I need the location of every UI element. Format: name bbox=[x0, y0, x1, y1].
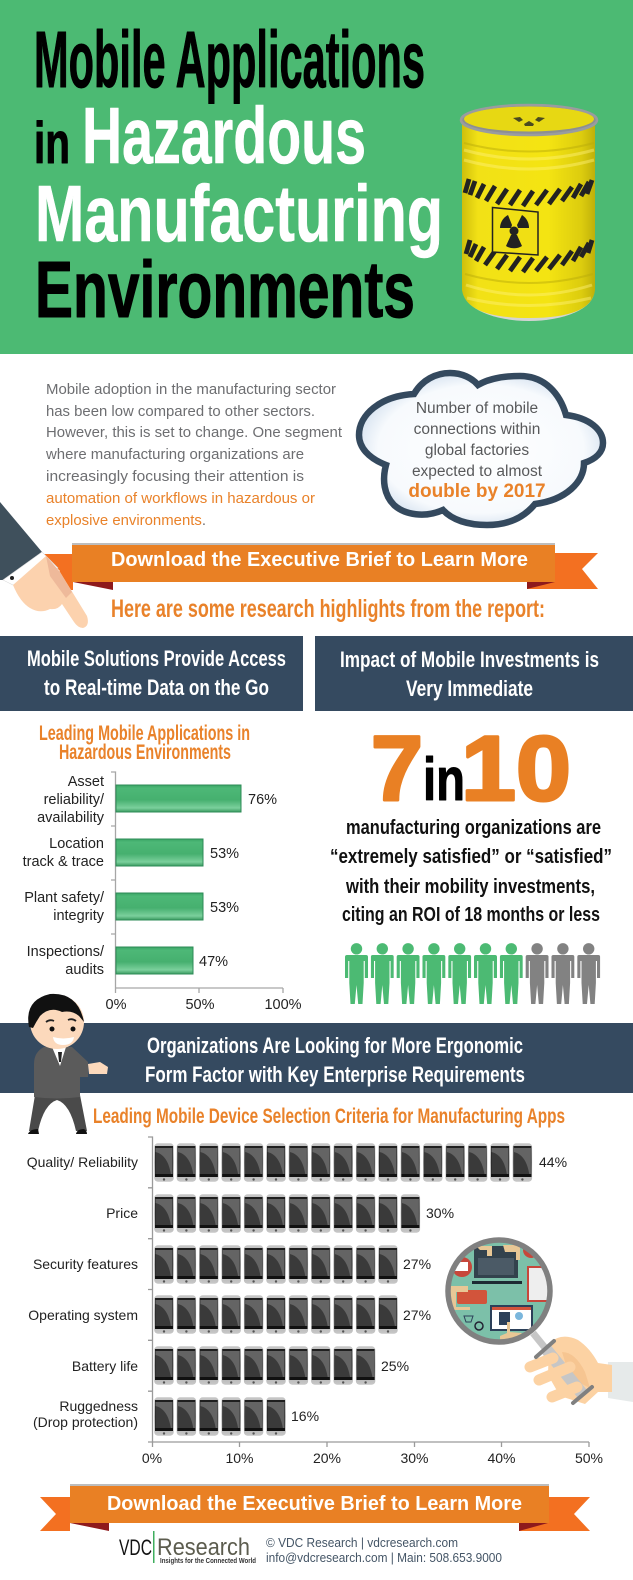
title bbox=[34, 15, 443, 334]
bar: location track and trace: Location bbox=[49, 836, 104, 852]
title: in bbox=[34, 111, 70, 176]
statistic: 7 in 10: in bbox=[423, 746, 465, 813]
panel: mobile solutions heading: Mobile Solutions Provide Access bbox=[27, 646, 286, 671]
callout: cloud: global factories bbox=[425, 442, 529, 459]
text block: intro: where manufacturing organizations are bbox=[45, 447, 304, 463]
row: battery life: Battery life bbox=[72, 1358, 138, 1374]
row: price: Price bbox=[106, 1205, 138, 1221]
axis labels: 0% bbox=[106, 997, 127, 1013]
text block: contact bbox=[266, 1535, 502, 1565]
axis labels: 30% bbox=[400, 1450, 429, 1466]
row: operating system: 27% bbox=[403, 1307, 431, 1323]
icon: pointing hand bbox=[0, 502, 88, 628]
chart heading: leading mobile applications: Hazardous Environments bbox=[59, 741, 231, 764]
bar: inspections: 47% bbox=[199, 954, 228, 970]
bar: asset reliability bbox=[37, 774, 277, 826]
row: quality and reliability: 44% bbox=[539, 1154, 567, 1170]
callout: cloud: expected to almost bbox=[412, 463, 543, 480]
text block: intro: Mobile adoption in the manufacturing sector bbox=[46, 382, 336, 398]
panel: ergonomic form factor heading: Form Factor with Key Enterprise Requirements bbox=[145, 1062, 525, 1087]
title: Hazardous bbox=[82, 91, 366, 180]
bar: plant safety: integrity bbox=[53, 908, 105, 924]
banner: download top bbox=[43, 543, 598, 590]
title: Manufacturing bbox=[35, 169, 443, 258]
row: ruggedness: 16% bbox=[291, 1408, 319, 1424]
axis labels: 10% bbox=[225, 1450, 254, 1466]
logo: VDC Research: VDC bbox=[119, 1535, 152, 1560]
bar: asset reliability: 76% bbox=[248, 792, 277, 808]
callout: cloud: double by 2017 bbox=[408, 481, 546, 502]
callout: cloud: Number of mobile bbox=[416, 400, 538, 417]
bar: plant safety: Plant safety/ bbox=[24, 890, 105, 906]
panel: mobile solutions heading: to Real-time Data on the Go bbox=[44, 675, 269, 700]
text block: intro: has been low compared to other sectors. bbox=[46, 404, 315, 420]
row: price bbox=[106, 1194, 454, 1233]
row: quality and reliability bbox=[27, 1143, 567, 1182]
axis labels: 50% bbox=[575, 1450, 603, 1466]
icon: yellow radioactive barrel bbox=[461, 105, 597, 321]
panel: impact heading bbox=[315, 636, 633, 711]
axis labels: 40% bbox=[487, 1450, 516, 1466]
banner: download bottom bbox=[40, 1484, 590, 1531]
bar: location track and trace bbox=[23, 836, 239, 870]
bar: inspections: Inspections/ bbox=[27, 944, 105, 960]
text block: intro: However, this is set to change. One segment bbox=[46, 425, 342, 441]
chart heading: leading mobile applications: Leading Mobile Applications in bbox=[39, 722, 250, 745]
callout: cloud bbox=[359, 373, 603, 525]
icon: magnifying glass and hand bbox=[448, 1240, 633, 1404]
bar: asset reliability: reliability/ bbox=[44, 792, 105, 808]
axis labels: 0% bbox=[142, 1450, 162, 1466]
banner: download bottom: Download the Executive Brief to Learn More bbox=[107, 1493, 522, 1515]
axis labels: 20% bbox=[313, 1450, 341, 1466]
logo: VDC Research bbox=[119, 1531, 256, 1565]
row: security features bbox=[33, 1245, 431, 1284]
text block: intro: explosive environments . bbox=[46, 513, 206, 529]
axis labels: 50% bbox=[185, 997, 215, 1013]
row: ruggedness: (Drop protection) bbox=[33, 1414, 138, 1430]
text block: contact: info@vdcresearch.com | Main: 508.653.9000 bbox=[266, 1550, 502, 1565]
pictogram: 7 of 10 people bbox=[345, 943, 600, 1004]
text block: intro: increasingly focusing their attention is bbox=[46, 469, 304, 485]
row: quality and reliability: Quality/ Reliability bbox=[27, 1154, 138, 1170]
bar: plant safety: 53% bbox=[210, 900, 239, 916]
bar: asset reliability: availability bbox=[37, 810, 105, 826]
banner: download top: Download the Executive Brief to Learn More bbox=[111, 549, 528, 571]
text block: satisfaction bbox=[330, 816, 612, 926]
panel: mobile solutions heading bbox=[0, 636, 303, 711]
title: Environments bbox=[35, 245, 415, 334]
panel: impact heading: Very Immediate bbox=[406, 676, 533, 701]
row: ruggedness bbox=[33, 1397, 319, 1436]
logo: VDC Research: Insights for the Connected World bbox=[160, 1556, 256, 1565]
callout: cloud: connections within bbox=[414, 421, 540, 438]
statistic: 7 in 10: 7 bbox=[371, 718, 423, 820]
header panel bbox=[0, 0, 633, 354]
row: battery life: 25% bbox=[381, 1358, 409, 1374]
chart heading: leading mobile applications bbox=[39, 722, 250, 764]
row: security features: Security features bbox=[33, 1256, 138, 1272]
panel: ergonomic form factor heading: Organizations Are Looking for More Ergonomic bbox=[147, 1033, 523, 1058]
row: operating system bbox=[28, 1295, 431, 1334]
bar chart: leading mobile applications bbox=[23, 772, 302, 1013]
row: price: 30% bbox=[426, 1205, 454, 1221]
row: security features: 27% bbox=[403, 1256, 431, 1272]
bar: inspections bbox=[27, 944, 228, 978]
pictorial chart: device selection criteria bbox=[27, 1137, 603, 1466]
axis labels bbox=[106, 997, 302, 1013]
statistic: 7 in 10 bbox=[371, 718, 571, 820]
bar: inspections: audits bbox=[65, 962, 104, 978]
statistic: 7 in 10: 10 bbox=[461, 718, 571, 820]
bar: location track and trace: 53% bbox=[210, 846, 239, 862]
text block: intro: automation of workflows in hazardous or bbox=[46, 491, 315, 507]
row: ruggedness: Ruggedness bbox=[59, 1398, 138, 1414]
row: battery life bbox=[72, 1346, 409, 1385]
row: operating system: Operating system bbox=[28, 1307, 138, 1323]
bar: asset reliability: Asset bbox=[68, 774, 104, 790]
icon: businessman bbox=[28, 994, 108, 1134]
bar: location track and trace: track & trace bbox=[23, 854, 104, 870]
bar: plant safety bbox=[24, 890, 239, 924]
axis labels bbox=[142, 1450, 603, 1466]
text block: contact: © VDC Research | vdcresearch.com bbox=[266, 1535, 458, 1550]
text block: intro bbox=[45, 382, 342, 529]
axis labels: 100% bbox=[264, 997, 302, 1013]
logo: VDC Research: Research bbox=[157, 1534, 250, 1561]
panel: ergonomic form factor heading bbox=[0, 1023, 633, 1093]
